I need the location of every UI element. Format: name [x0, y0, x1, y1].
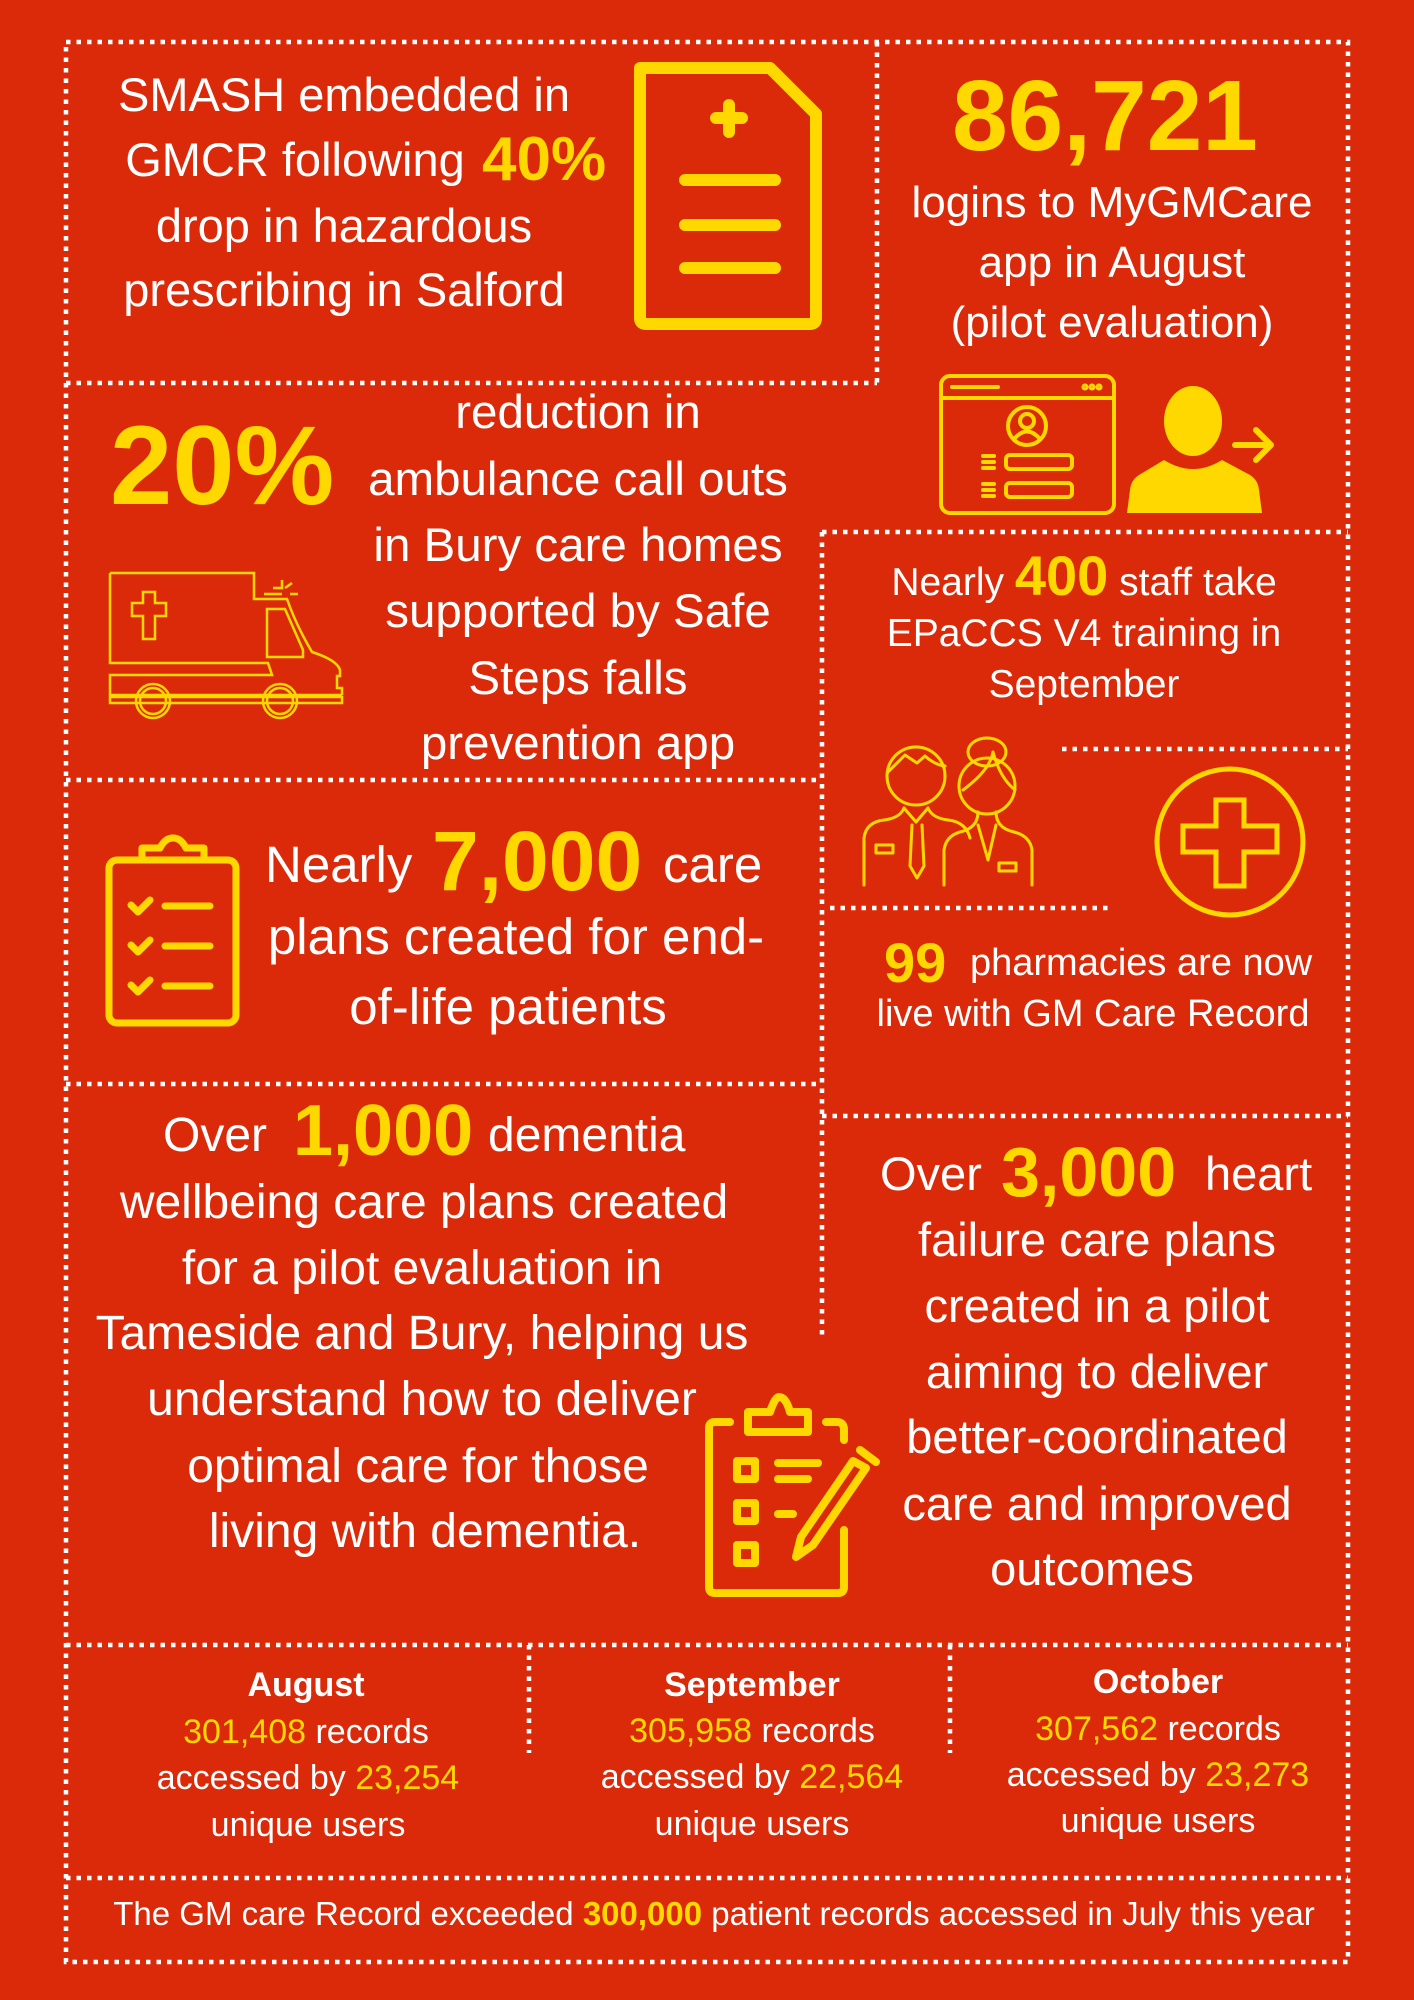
icon: login window	[941, 376, 1114, 513]
panel: EPaCCS training: live with GM Care Record	[877, 993, 1309, 1035]
text: 99 pharmacies: 99	[884, 931, 946, 994]
icon: cross in circle	[1157, 769, 1303, 915]
text: logins: (pilot evaluation)	[951, 298, 1273, 347]
text: logins: logins to MyGMCare	[911, 178, 1313, 227]
panel: heart failure: aiming to deliver	[926, 1345, 1268, 1398]
text: over 3,000 heart: Over	[880, 1147, 982, 1200]
text: over 1,000 dementia: 1,000	[293, 1091, 473, 1171]
panel: October: 307,562 records	[1035, 1710, 1281, 1748]
footer text: The GM care Record exceeded 300,000 patient records accessed in July this year	[113, 1895, 1315, 1932]
panel: September: September	[664, 1666, 840, 1704]
icon: document	[640, 68, 816, 324]
text: over 3,000 heart: 3,000	[1001, 1133, 1176, 1211]
text: reduction: reduction in	[455, 386, 701, 439]
text: logins: app in August	[979, 238, 1245, 287]
text: SMASH: prescribing in Salford	[123, 263, 565, 316]
text: SMASH: SMASH embedded in	[118, 68, 570, 121]
text: nearly 400 staff: Nearly 400 staff take	[891, 544, 1277, 607]
panel: heart failure: care and improved	[902, 1477, 1292, 1530]
panel: September	[601, 1666, 903, 1843]
text: reduction: Steps falls	[468, 652, 688, 705]
text: over 3,000 heart: heart	[1205, 1147, 1312, 1200]
panel: dementia	[96, 1091, 748, 1558]
panel: August: 301,408 records	[183, 1713, 429, 1751]
panel: dementia: for a pilot evaluation in	[182, 1242, 662, 1295]
panel: October	[1007, 1663, 1309, 1840]
panel: dementia: living with dementia.	[209, 1505, 641, 1558]
panel: heart failure: better-coordinated	[906, 1410, 1288, 1463]
panel: dementia: understand how to deliver	[147, 1373, 697, 1426]
text: SMASH: drop in hazardous	[156, 199, 532, 252]
text: 7,000: 7,000	[432, 814, 642, 908]
text: over 1,000 dementia: dementia	[488, 1109, 686, 1162]
panel: heart failure	[709, 1133, 1312, 1595]
text: 7,000: Nearly	[265, 836, 413, 893]
text: nearly 400 staff: September	[989, 663, 1179, 706]
text: nearly 400 staff: EPaCCS V4 training in	[887, 612, 1281, 655]
panel: 7,000 care plans: plans created for end-	[268, 908, 764, 965]
panel: October: accessed by 23,273	[1007, 1756, 1309, 1794]
text: reduction: prevention app	[421, 717, 735, 770]
panel: heart failure: outcomes	[990, 1542, 1194, 1595]
panel: September: unique users	[655, 1805, 849, 1843]
panel: dementia: wellbeing care plans created	[119, 1176, 728, 1229]
text: reduction: supported by Safe	[385, 585, 771, 638]
icon: clipboard with pencil	[709, 1397, 876, 1593]
panel: 7,000 care plans: of-life patients	[349, 978, 667, 1035]
text: over 1,000 dementia: Over	[163, 1109, 267, 1162]
icon: user login	[1127, 386, 1271, 513]
text: reduction: in Bury care homes	[373, 519, 783, 572]
text: 7,000: care	[663, 836, 762, 893]
panel: SMASH	[118, 68, 816, 324]
icon: clipboard checklist	[109, 838, 236, 1023]
panel: MyGMCare logins	[911, 60, 1313, 513]
panel: dementia: optimal care for those	[187, 1440, 649, 1493]
panel: heart failure: failure care plans	[918, 1213, 1276, 1266]
text: reduction: ambulance call outs	[368, 453, 788, 506]
icon: ambulance	[110, 573, 342, 718]
text: 99 pharmacies: pharmacies are now	[970, 942, 1313, 984]
panel: August: August	[247, 1666, 365, 1704]
panel: October: unique users	[1061, 1802, 1255, 1840]
text: SMASH: GMCR following	[125, 133, 465, 186]
panel: dementia: Tameside and Bury, helping us	[96, 1307, 748, 1360]
icon: staff	[864, 738, 1032, 885]
stat: 40%: 40%	[482, 125, 606, 194]
panel: 7,000 care plans	[109, 814, 764, 1035]
stat: 86,721: 86,721	[952, 60, 1258, 172]
panel: September: accessed by 22,564	[601, 1758, 903, 1796]
panel: August	[157, 1666, 459, 1844]
panel: August: accessed by 23,254	[157, 1759, 459, 1797]
panel: ambulance call outs	[110, 386, 788, 770]
stat: 20%: 20%	[110, 403, 334, 528]
panel: September: 305,958 records	[629, 1712, 875, 1750]
panel: October: October	[1093, 1663, 1223, 1701]
panel: August: unique users	[211, 1806, 405, 1844]
panel: heart failure: created in a pilot	[925, 1279, 1269, 1332]
panel: EPaCCS training	[864, 544, 1313, 1035]
